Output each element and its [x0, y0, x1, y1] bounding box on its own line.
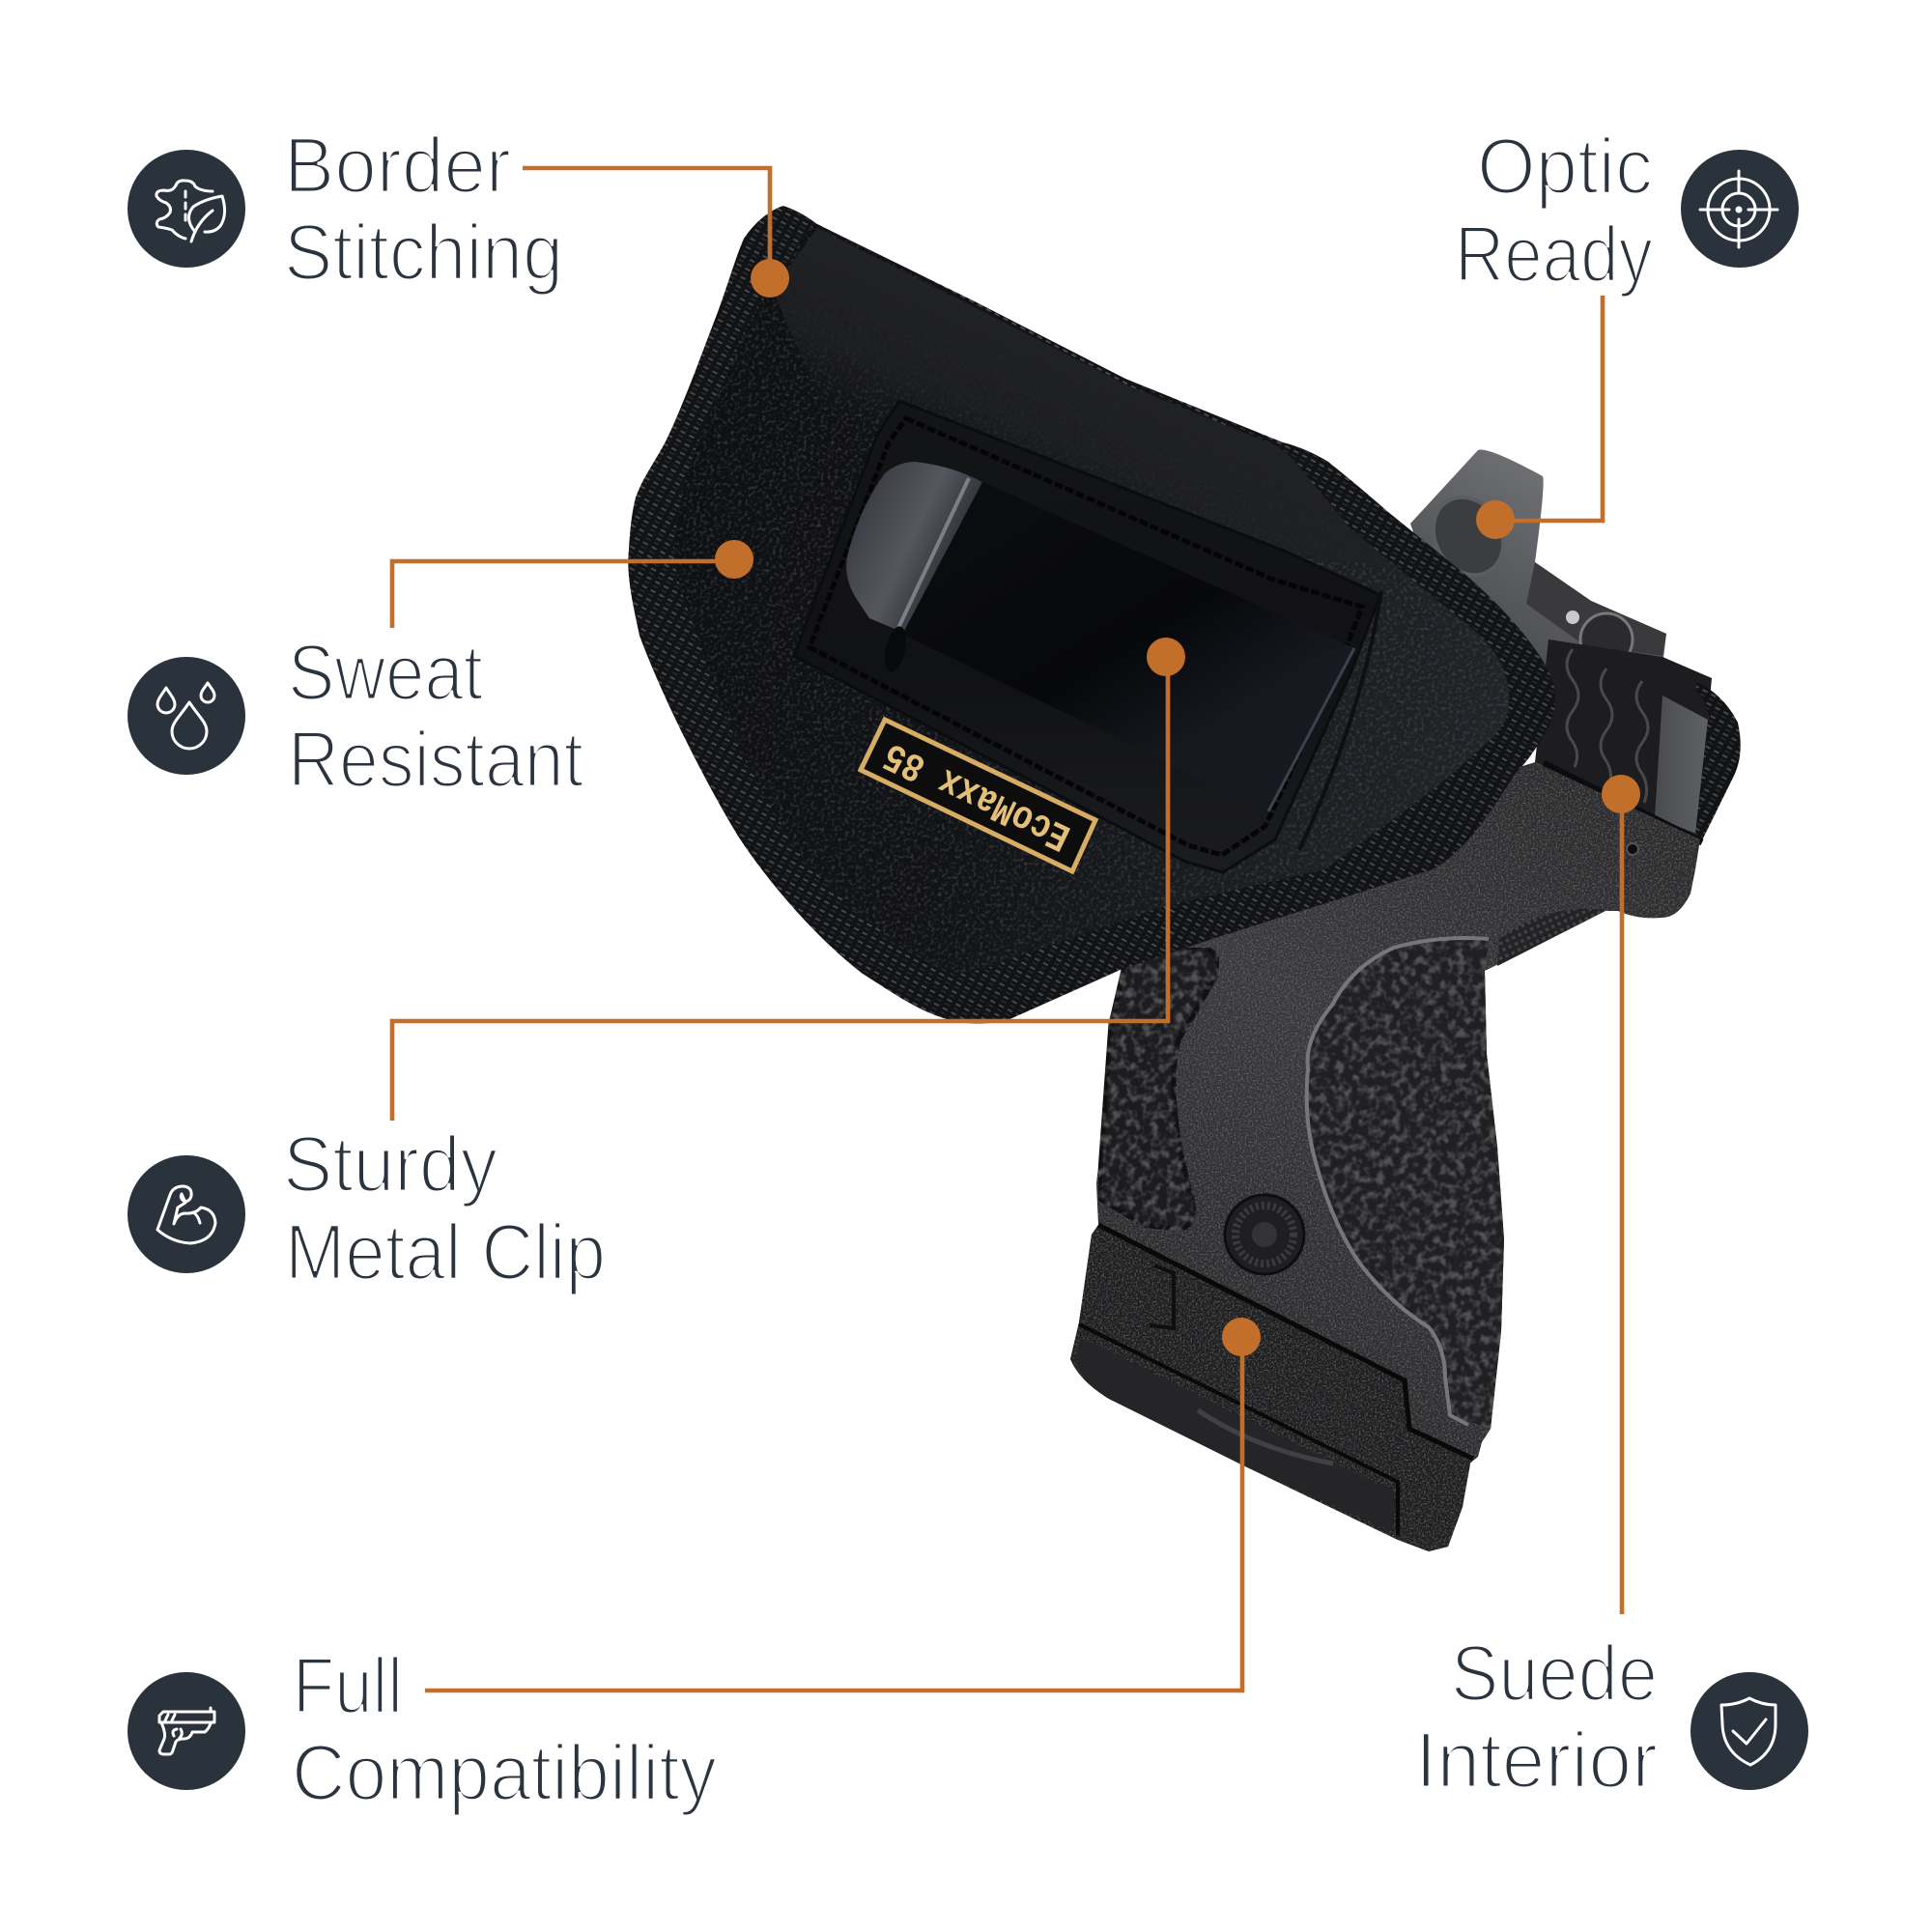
holster: clip patch: [794, 401, 1380, 872]
holster: metal belt clip: [846, 462, 1354, 811]
callout lines and dots: [392, 168, 1640, 1690]
feature: sturdy metal clip: [128, 1121, 606, 1296]
icon: crosshair: [1681, 150, 1799, 268]
icon: water drops: [128, 657, 245, 775]
pistol: front holster binding: [1695, 681, 1741, 840]
pistol: backstrap pebble panel: [1307, 938, 1504, 1429]
feature: full compatibility: [128, 1642, 717, 1817]
feature: suede interior: [1415, 1630, 1808, 1804]
callout: suede interior: [1602, 775, 1640, 1614]
label: Sturdy Metal Clip: Metal Clip: [285, 1208, 606, 1296]
feature: sweat resistant: [128, 629, 583, 804]
label: Sturdy Metal Clip: [283, 1121, 606, 1296]
clip: fold highlight: [898, 478, 969, 628]
label: Border Stitching: Border: [284, 122, 511, 210]
label: Suede Interior: Interior: [1415, 1717, 1658, 1804]
clip: rounded tab: [846, 462, 982, 633]
label: Optic Ready: Ready: [1455, 211, 1653, 298]
holster: leather crease: [1299, 591, 1381, 850]
pistol: pin hole: [1627, 843, 1638, 855]
icon: leather and leaf: [128, 150, 245, 268]
label: Full Compatibility: [292, 1642, 717, 1817]
label: Border Stitching: [284, 122, 563, 297]
pistol: magazine: [1070, 1225, 1473, 1551]
icon: pistol: [128, 1672, 245, 1790]
label: Full Compatibility: Compatibility: [292, 1729, 717, 1817]
clip: edge sheen: [1268, 648, 1354, 811]
icon: shield check: [1690, 1672, 1808, 1790]
callout: border stitching: [523, 168, 789, 298]
holster: gold EcoMaxx label: EcoMaxx 85: [877, 731, 1078, 859]
clip: slot: [881, 624, 910, 674]
callout: sweat resistant: [392, 540, 753, 628]
icon: flexed arm: [128, 1155, 245, 1273]
pistol: backstrap edge highlight: [1307, 938, 1489, 1425]
pistol: red dot optic: [1410, 450, 1666, 676]
holster: [628, 206, 1555, 1024]
feature: border stitching: [128, 122, 563, 297]
label: Suede Interior: Suede: [1451, 1630, 1658, 1718]
feature: optic ready: [1455, 123, 1799, 298]
label: Sturdy Metal Clip: Sturdy: [283, 1121, 497, 1208]
label: Optic Ready: Optic: [1477, 123, 1653, 211]
label: Full Compatibility: Full: [293, 1642, 403, 1730]
pistol: frame and grip: [1070, 762, 1700, 1551]
callout: optic ready: [1476, 296, 1603, 539]
callout: full compatibility: [425, 1318, 1261, 1690]
label: Suede Interior: [1415, 1630, 1658, 1804]
pistol: finger groove panel: [1098, 948, 1219, 1230]
label: Sweat Resistant: Sweat: [288, 629, 483, 717]
label: Optic Ready: [1455, 123, 1653, 298]
callout: sturdy metal clip: [392, 638, 1185, 1121]
label: Sweat Resistant: Resistant: [288, 716, 583, 804]
pistol: [1070, 450, 1741, 1551]
pistol: logo medallion: [1225, 1195, 1304, 1274]
label: Sweat Resistant: [288, 629, 583, 804]
pistol: slide with serrations: [1535, 639, 1712, 842]
holster: textured upper leather band: [773, 228, 1391, 565]
pistol: checkered dimple: [1497, 909, 1605, 966]
holster: nylon border binding: [628, 206, 1555, 1024]
label: Border Stitching: Stitching: [284, 209, 563, 297]
holster: leather body: [674, 224, 1509, 972]
